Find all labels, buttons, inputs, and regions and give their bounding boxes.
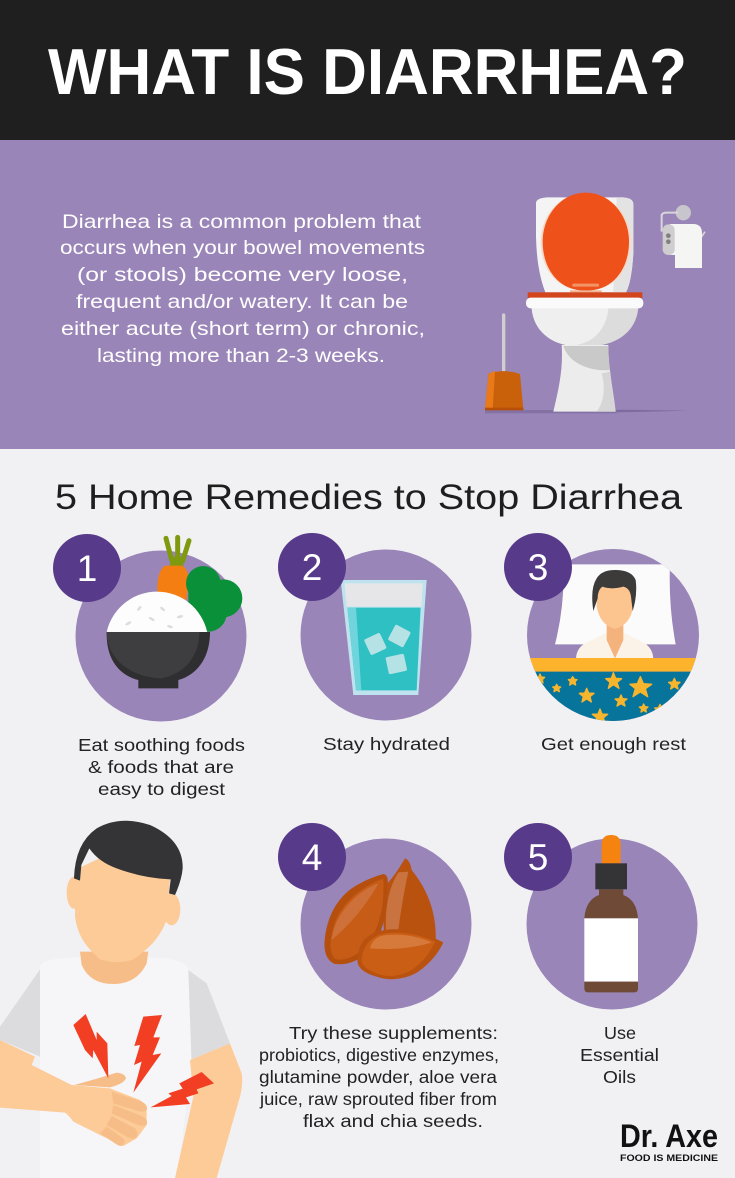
icon: pain bolt right xyxy=(151,1072,214,1107)
caption 4: probiotics, digestive enzymes, xyxy=(259,1045,499,1065)
caption 1: & foods that are xyxy=(88,757,234,777)
caption 5: Essential xyxy=(580,1045,659,1065)
caption 4: flax and chia seeds. xyxy=(303,1111,483,1131)
definition text: lasting more than 2-3 weeks. xyxy=(97,345,385,367)
remedy 4: supplements xyxy=(259,823,499,1131)
logo: Dr. Axe: Dr. Axe xyxy=(620,1118,718,1154)
badge 3: 3 xyxy=(528,547,548,588)
caption 5 xyxy=(580,1023,659,1087)
caption 3: Get enough rest xyxy=(541,734,686,754)
caption 1: Eat soothing foods xyxy=(78,735,245,755)
caption 1 xyxy=(78,735,245,799)
caption 4: juice, raw sprouted fiber from xyxy=(259,1089,497,1109)
badge 3 xyxy=(504,533,572,601)
caption 5: Use xyxy=(604,1023,636,1043)
definition text: (or stools) become very loose, xyxy=(77,264,408,286)
icon: toilet xyxy=(485,193,705,413)
caption 4 xyxy=(259,1023,499,1131)
definition text xyxy=(60,211,425,367)
icon: toilet paper xyxy=(662,205,705,268)
badge 4 xyxy=(278,823,346,891)
icon: seeds xyxy=(324,858,443,979)
definition text: frequent and/or watery. It can be xyxy=(76,291,408,313)
badge 5 xyxy=(504,823,572,891)
icon: dropper bottle xyxy=(584,835,638,992)
badge 1 xyxy=(53,534,121,602)
panel: definition xyxy=(0,140,735,449)
badge 4: 4 xyxy=(302,837,322,878)
remedy 2: hydration xyxy=(278,533,472,754)
icon: glass of water xyxy=(341,580,427,695)
badge 2 xyxy=(278,533,346,601)
caption 5: Oils xyxy=(603,1067,636,1087)
icon: pain bolt left xyxy=(73,1014,108,1078)
icon: rice bowl with vegetables xyxy=(107,537,242,688)
definition text: occurs when your bowel movements xyxy=(60,237,425,259)
remedy 3: rest xyxy=(504,533,705,754)
caption 2: Stay hydrated xyxy=(323,734,450,754)
illustration: man with stomach pain xyxy=(0,821,242,1178)
badge 1: 1 xyxy=(77,548,97,589)
badge 5: 5 xyxy=(528,837,548,878)
definition text: Diarrhea is a common problem that xyxy=(62,211,422,233)
badge 2: 2 xyxy=(302,547,322,588)
title: WHAT IS DIARRHEA? xyxy=(48,35,687,108)
title banner xyxy=(0,0,735,140)
caption 4: glutamine powder, aloe vera xyxy=(259,1067,497,1087)
caption 1: easy to digest xyxy=(98,779,225,799)
definition text: either acute (short term) or chronic, xyxy=(61,318,425,340)
logo: Dr. Axe: FOOD IS MEDICINE xyxy=(620,1153,718,1163)
remedy 1: soothing foods xyxy=(53,534,246,799)
caption 4: Try these supplements: xyxy=(289,1023,498,1043)
heading: 5 home remedies: 5 Home Remedies to Stop Diarrhea xyxy=(55,478,683,517)
remedy 5: essential oils xyxy=(504,823,698,1087)
icon: pain bolt middle xyxy=(133,1015,162,1093)
icon: man sleeping in bed xyxy=(530,564,696,721)
